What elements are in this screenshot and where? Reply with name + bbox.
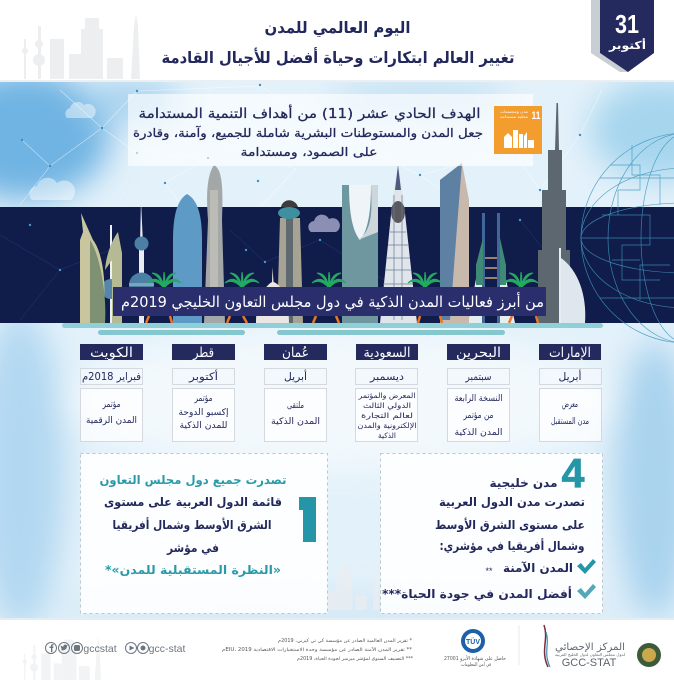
column: Oman: عُمان: [282, 345, 309, 361]
Kuwait towers: [101, 200, 154, 323]
night cloud: [308, 215, 340, 232]
globe wireframe: [581, 133, 674, 343]
tall sail tower: [440, 163, 469, 323]
teal platform bars: [62, 323, 603, 335]
column: Saudi Arabia: المعرض والمؤتمر: [357, 391, 416, 400]
title band: [113, 287, 546, 316]
column: UAE: معرض: [562, 400, 578, 410]
goal description: جعل المدن والمستوطنات البشرية شاملة للجميع، وآمنة، وقادرة: [133, 125, 483, 141]
date badge: [591, 0, 654, 72]
icon: SDG 11: محلية مستدامة: [500, 114, 528, 119]
GCC-STAT logo: GCC-STAT: [562, 657, 617, 669]
column: Qatar: أكتوبر: [188, 369, 218, 383]
panel body: قائمة الدول العربية على مستوى: [104, 495, 282, 510]
clouds in the sky: [29, 102, 96, 200]
four cities text: تصدرت مدن الدول العربية: [439, 495, 585, 510]
icon: SDG 11: [494, 106, 542, 154]
Dubai Burj Khalifa: [538, 103, 570, 323]
column: Qatar: مؤتمر: [194, 394, 213, 404]
left beige towers: [80, 213, 122, 323]
icon: SDG 11: مدن ومجتمعات: [500, 109, 528, 114]
column: Saudi Arabia: الذكية: [378, 431, 396, 440]
column: Oman: المدن الذكية: [271, 417, 320, 427]
palm trees: [147, 272, 538, 288]
footnotes: * تقرير المدن العالمية الصادر عن مؤسسة كي تي كيرني، 2019م: [278, 638, 413, 644]
column: Bahrain: من مؤتمر: [463, 411, 494, 421]
column: Kuwait: مؤتمر: [102, 400, 121, 410]
big number 1: [299, 497, 316, 542]
goal description: [133, 125, 483, 160]
column: Bahrain: النسخة الرابعة: [454, 394, 502, 404]
safe cities: المدن الآمنة: [503, 561, 573, 575]
footnotes: *** التصنيف السنوي لمؤشر ميرسر لجودة الحياة، 2019م: [297, 656, 414, 662]
column: Bahrain: سبتمبر: [465, 371, 492, 383]
icon: check safe cities: [577, 559, 596, 574]
icon: SDG 11: 11: [532, 110, 540, 122]
GCC-STAT logo: لدول مجلس التعاون لدول الخليج العربية: [555, 652, 625, 657]
column: Bahrain: [447, 344, 510, 442]
four cities text: [435, 476, 585, 554]
column: Kuwait: [80, 344, 143, 442]
Doha blue tower: [173, 194, 202, 323]
panel body: في مؤشر: [166, 541, 219, 556]
icon: check quality of life: [577, 584, 596, 599]
skyline buildings: [80, 103, 585, 323]
panel body: [104, 495, 282, 556]
column: UAE: أبريل: [558, 369, 582, 383]
column: Saudi Arabia: السعودية: [364, 345, 410, 361]
network dots over sky: [21, 84, 581, 191]
four cities text: مدن خليجية: [490, 476, 558, 490]
network lines over sky: [20, 86, 602, 207]
GCC-STAT logo: [519, 625, 661, 669]
title band: من أبرز فعاليات المدن الذكية في دول مجلس التعاون الخليجي 2019م: [121, 292, 544, 312]
navy skyline band: [0, 207, 674, 323]
teal lead: تصدرت جميع دول مجلس التعاون: [100, 473, 286, 488]
Burj Al Arab: [559, 248, 585, 323]
panel body: الشرق الأوسط وشمال أفريقيا: [112, 517, 272, 533]
column: UAE: مدن المستقبل: [551, 417, 589, 427]
TUV certificate: [444, 629, 506, 668]
column: Saudi Arabia: ديسمبر: [369, 371, 404, 383]
orange palm trunks: [146, 316, 538, 323]
ghost skyline in footer: [23, 637, 101, 680]
main title: [162, 18, 514, 67]
column: Saudi Arabia: لعالم التجارة: [361, 411, 413, 420]
column: Qatar: للمدن الذكية: [180, 421, 228, 431]
goal description: على الصمود، ومستدامة: [240, 145, 378, 160]
header divider: [0, 80, 674, 82]
stars: **: [485, 566, 493, 576]
four cities text: وشمال أفريقيا في مؤشري:: [440, 538, 584, 554]
column: Kuwait: فبراير 2018م: [82, 371, 141, 383]
date badge: أكتوبر: [608, 38, 646, 52]
social handles: [46, 642, 185, 655]
column: Oman: [264, 344, 327, 442]
footer: [0, 618, 674, 680]
TUV certificate: حاصل على شهادة الأيزو 27001: [444, 655, 506, 662]
Al Faisaliah tower: [380, 165, 417, 323]
column: Oman: أبريل: [284, 369, 307, 383]
column: UAE: [539, 344, 602, 442]
GCC-STAT logo: المركز الإحصائي: [555, 642, 625, 653]
column: Qatar: [172, 344, 235, 442]
column: Bahrain: البحرين: [456, 345, 501, 361]
column: Saudi Arabia: الإلكترونية والمدن: [358, 421, 416, 430]
mosque dome: [256, 267, 289, 323]
panel: Future outlook: [80, 454, 328, 614]
Kingdom Centre: [342, 185, 378, 323]
footnotes: [222, 638, 414, 662]
column: Qatar: إكسبو الدوحة: [178, 408, 228, 418]
column: Bahrain: المدن الذكية: [454, 428, 502, 438]
main title: اليوم العالمي للمدن: [264, 18, 410, 38]
social handles: gccstat: [83, 643, 117, 655]
column: Oman: ملتقى: [287, 401, 304, 411]
big number 4: 4: [562, 450, 585, 496]
footnotes: ** تقرير المدن الآمنة الصادر عن مؤسسة وحدة الاستخبارات الاقتصادية EIU، 2019م: [222, 647, 413, 653]
Oman tower: [277, 200, 303, 323]
column: Saudi Arabia: الدولي الثالث: [363, 401, 411, 410]
goal heading: الهدف الحادي عشر (11) من أهداف التنمية المستدامة: [138, 104, 480, 122]
column: Qatar: قطر: [192, 345, 214, 361]
column: Kuwait: المدن الرقمية: [86, 416, 137, 426]
Bahrain World Trade Centre: [468, 213, 515, 323]
quality of life: أفضل المدن في جودة الحياة***: [382, 586, 572, 602]
panel: four Gulf cities: [294, 450, 602, 614]
main title: تغيير العالم ابتكارات وحياة أفضل للأجيال القادمة: [162, 47, 514, 67]
ghost skyline in header: [22, 14, 140, 79]
panel: SDG goal 11: [128, 94, 542, 166]
column: Saudi Arabia: [356, 344, 418, 442]
column: Kuwait: الكويت: [90, 345, 133, 361]
social handles: gcc-stat: [149, 643, 185, 655]
four cities text: على مستوى الشرق الأوسط: [435, 517, 585, 533]
TUV certificate: في أمن المعلومات: [461, 661, 491, 668]
TUV certificate: TÜV: [466, 637, 480, 646]
teal index name: «النظرة المستقبلية للمدن»*: [105, 563, 281, 577]
date badge: 31: [615, 9, 639, 39]
Doha tower: [204, 165, 225, 323]
ghost skyline inside panels: [294, 563, 379, 610]
column: UAE: الإمارات: [549, 345, 591, 361]
header: [0, 14, 674, 82]
